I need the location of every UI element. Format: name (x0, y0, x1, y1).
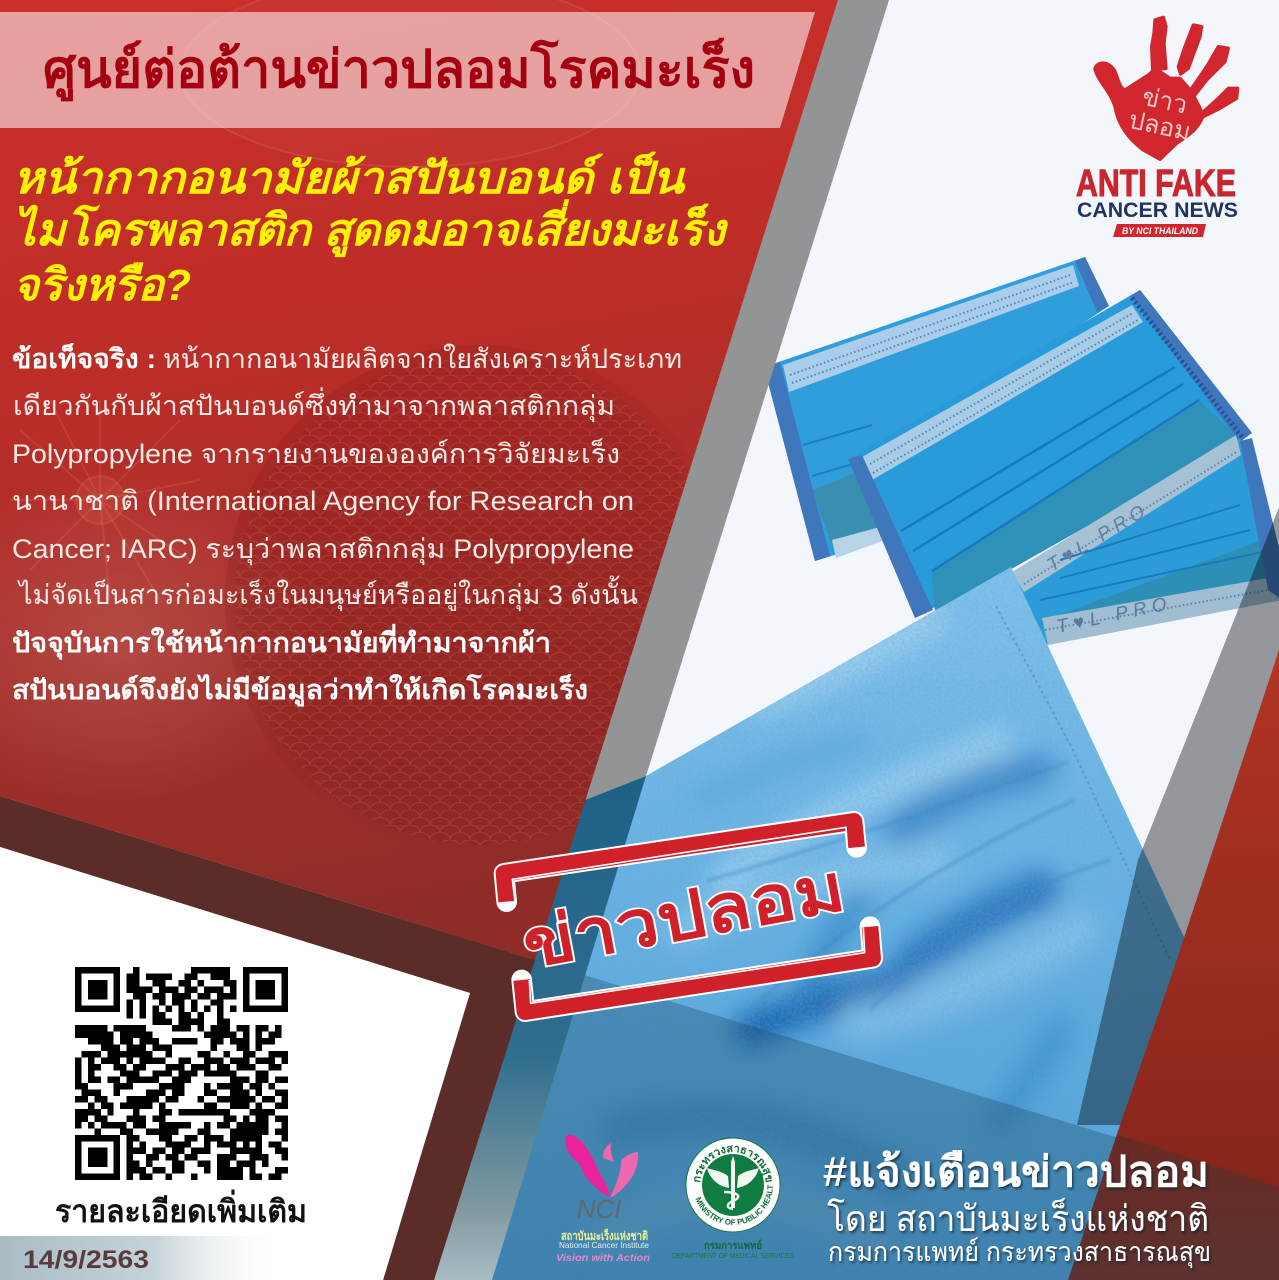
department: กรมการแพทย์ กระทรวงสาธารณสุข (828, 1236, 1211, 1269)
virus image (10, 400, 200, 600)
NCI english name: National Cancer Institute (559, 1240, 649, 1250)
logo wordmark: ANTI FAKE (1076, 163, 1236, 205)
QR code (75, 967, 288, 1180)
stamp: fake news (504, 821, 873, 1012)
logo tag: BY NCI THAILAND (1122, 226, 1198, 237)
logo: anti fake cancer news: CANCER NEWS (1077, 199, 1238, 222)
text block: facts: ปัจจุบันการใช้หน้ากากอนามัยที่ทำมาจากผ้า (12, 623, 551, 660)
NCI script: NCI (577, 1194, 621, 1224)
heading: question: จริงหรือ? (13, 261, 191, 310)
date: 14/9/2563 (23, 1246, 149, 1274)
department english: DEPARTMENT OF MEDICAL SERVICES (672, 1251, 794, 1260)
hand text (1126, 83, 1193, 146)
text block: facts: เดียวกันกับผ้าสปันบอนด์ซึ่งทำมาจากพลาสติกกลุ่ม (13, 387, 615, 423)
text block: facts: Polypropylene จากรายงานขององค์การวิจัยมะเร็ง (12, 436, 620, 469)
NCI thai name: สถาบันมะเร็งแห่งชาติ (561, 1228, 648, 1243)
stamp text: ข่าวปลอม (517, 850, 850, 982)
photo: lower blue mask with printed band (1012, 435, 1279, 645)
organisation: โดย สถาบันมะเร็งแห่งชาติ (827, 1196, 1209, 1239)
hashtag: #แจ้งเตือนข่าวปลอม (823, 1148, 1209, 1195)
icon: caduceus (707, 1156, 759, 1209)
photo: back blue mask (764, 257, 1109, 561)
diagonal band: lower left tinted (425, 776, 646, 1280)
heading: question: หน้ากากอนามัยผ้าสปันบอนด์ เป็น (13, 151, 686, 203)
text block: facts: ไม่จัดเป็นสารก่อมะเร็งในมนุษย์หรืออยู่ในกลุ่ม 3 ดังนั้น (17, 575, 638, 612)
QR caption: รายละเอียดเพิ่มเติม (55, 1189, 307, 1229)
photo: large blue mask close-up (400, 560, 1200, 1280)
hand text: ปลอม (1126, 106, 1193, 146)
heading: question (13, 151, 729, 310)
seal caption bottom: MINISTRY OF PUBLIC HEALTH (696, 1184, 773, 1225)
seal caption top: กระทรวงสาธารณสุข (694, 1145, 772, 1182)
tumour cell image (225, 345, 689, 845)
photo: lower blue mask with printed band: T♥L PRO (1055, 594, 1169, 638)
NCI tagline: Vision with Action (556, 1253, 650, 1264)
text block: facts: สปันบอนด์จึงยังไม่มีข้อมูลว่าทำให้เกิดโรคมะเร็ง (12, 672, 588, 707)
logo: anti fake cancer news (1076, 17, 1238, 237)
diagonal band: upper left gray (585, 0, 889, 800)
panel: red background (0, 0, 838, 960)
text block: facts: นานาชาติ (International Agency for Research on (12, 486, 634, 516)
stamp frame (504, 821, 873, 1012)
heading: question: ไมโครพลาสติก สูดดมอาจเสี่ยงมะเร็ง (13, 199, 729, 258)
text block: facts: หน้ากากอนามัยผลิตจากใยสังเคราะห์ประเภท (163, 343, 682, 374)
text block: facts: ข้อเท็จจริง : (12, 341, 156, 374)
panel: brown corner (0, 796, 535, 1280)
title: ศูนย์ต่อต้านข่าวปลอมโรคมะเร็ง (43, 38, 755, 102)
department thai: กรมการแพทย์ (704, 1239, 762, 1252)
panel: title banner (0, 12, 815, 128)
panel: white QR area (0, 847, 470, 1280)
footer hashtag and credit (823, 1148, 1211, 1269)
panel: right red shape (1117, 650, 1279, 1190)
mask print: T♥L PRO (1044, 502, 1149, 576)
diagonal band: right gray (1077, 500, 1279, 1125)
date strip (0, 1236, 285, 1280)
text block: facts (12, 341, 682, 707)
logo: ministry of public health (672, 1138, 794, 1260)
text block: facts: Cancer; IARC) ระบุว่าพลาสติกกลุ่ม Polypropylene (12, 534, 634, 566)
shadow overlay over lower mask (400, 960, 1279, 1280)
logo: national cancer institute (556, 1135, 650, 1264)
icon: pink butterfly (565, 1135, 638, 1198)
hand text: ข่าว (1140, 83, 1190, 120)
photo: front blue mask (848, 290, 1252, 618)
icon: red hand (1095, 17, 1238, 159)
panel: right lower brown shape (1068, 1134, 1279, 1280)
